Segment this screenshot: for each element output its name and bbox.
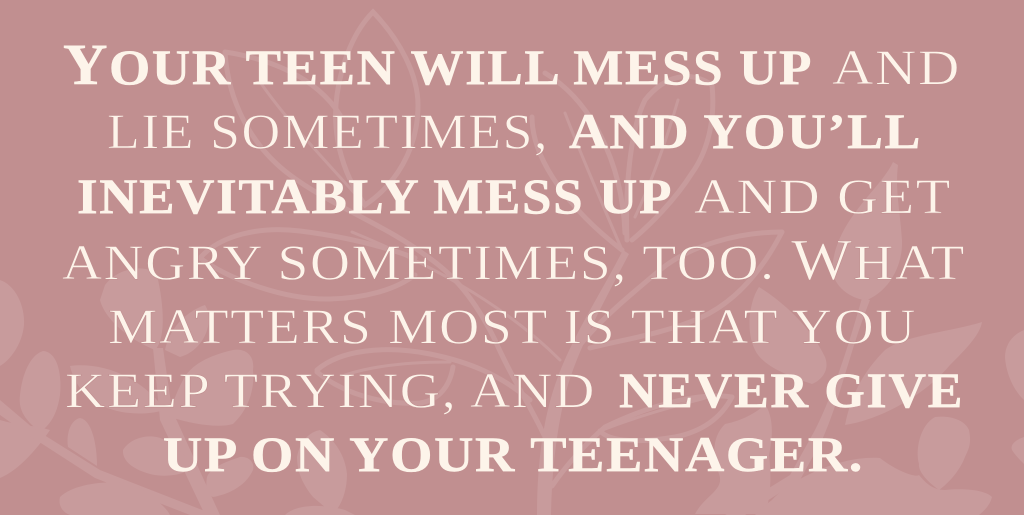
line 1 bold: YOUR TEEN WILL MESS UP bbox=[63, 32, 813, 97]
line 3 bold: INEVITABLY MESS UP bbox=[77, 168, 673, 224]
botanical solid leaves left bbox=[0, 268, 355, 515]
line 7 bold: UP ON YOUR TEENAGER. bbox=[163, 426, 864, 482]
line 4 regular: ANGRY SOMETIMES, TOO. WHAT bbox=[62, 227, 966, 292]
line 6 regular: KEEP TRYING, AND bbox=[65, 362, 596, 418]
line 6 bold: NEVER GIVE bbox=[619, 362, 964, 418]
line 3 regular: AND GET bbox=[694, 168, 952, 224]
line 1 regular: AND bbox=[832, 39, 961, 95]
quote text bbox=[62, 32, 966, 482]
line 2 bold: AND YOU’LL bbox=[569, 103, 922, 159]
line 5 regular: MATTERS MOST IS THAT YOU bbox=[108, 298, 917, 354]
botanical solid leaves right bbox=[695, 162, 1024, 515]
botanical central stem bbox=[537, 250, 629, 515]
line 2 regular: LIE SOMETIMES, bbox=[107, 103, 549, 159]
botanical outline leaves bbox=[200, 12, 782, 486]
